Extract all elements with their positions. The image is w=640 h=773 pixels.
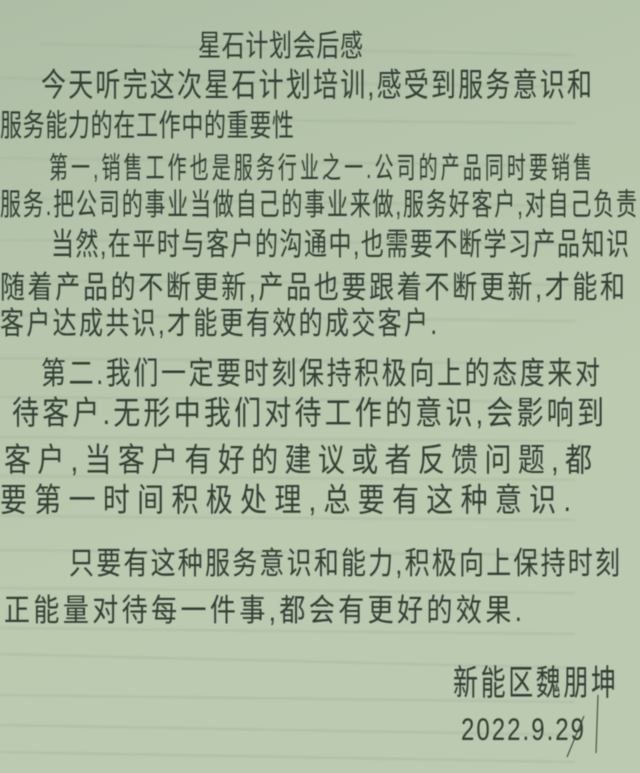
point two line 2: 待客户.无形中我们对待工作的意识,会影响到 xyxy=(12,396,604,432)
point one line 2: 服务.把公司的事业当做自己的事业来做,服务好客户,对自己负责 xyxy=(0,187,637,222)
point one line 4: 随着产品的不断更新,产品也要跟着不断更新,才能和 xyxy=(0,269,625,305)
point one line 1: 第一,销售工作也是服务行业之一.公司的产品同时要销售 xyxy=(49,152,592,185)
point two line 3: 客户,当客户有好的建议或者反馈问题,都 xyxy=(4,443,592,479)
point one line 5: 客户达成共识,才能更有效的成交客户. xyxy=(0,306,437,341)
point two line 4: 要第一时间积极处理,总要有这种意识. xyxy=(0,483,571,519)
opening paragraph line 2: 服务能力的在工作中的重要性 xyxy=(0,108,294,143)
title: 星石计划会后感 xyxy=(198,29,363,63)
signature: 新能区魏朋坤 xyxy=(453,664,616,703)
long pen strokes by signature and date xyxy=(567,695,598,757)
closing line 1: 只要有这种服务意识和能力,积极向上保持时刻 xyxy=(69,545,620,581)
point one line 3: 当然,在平时与客户的沟通中,也需要不断学习产品知识 xyxy=(51,227,629,262)
point two line 1: 第二.我们一定要时刻保持积极向上的态度来对 xyxy=(41,355,600,391)
closing line 2: 正能量对待每一件事,都会有更好的效果. xyxy=(4,594,522,629)
date: 2022.9.29 xyxy=(461,712,584,747)
opening paragraph line 1: 今天听完这次星石计划培训,感受到服务意识和 xyxy=(41,67,592,104)
